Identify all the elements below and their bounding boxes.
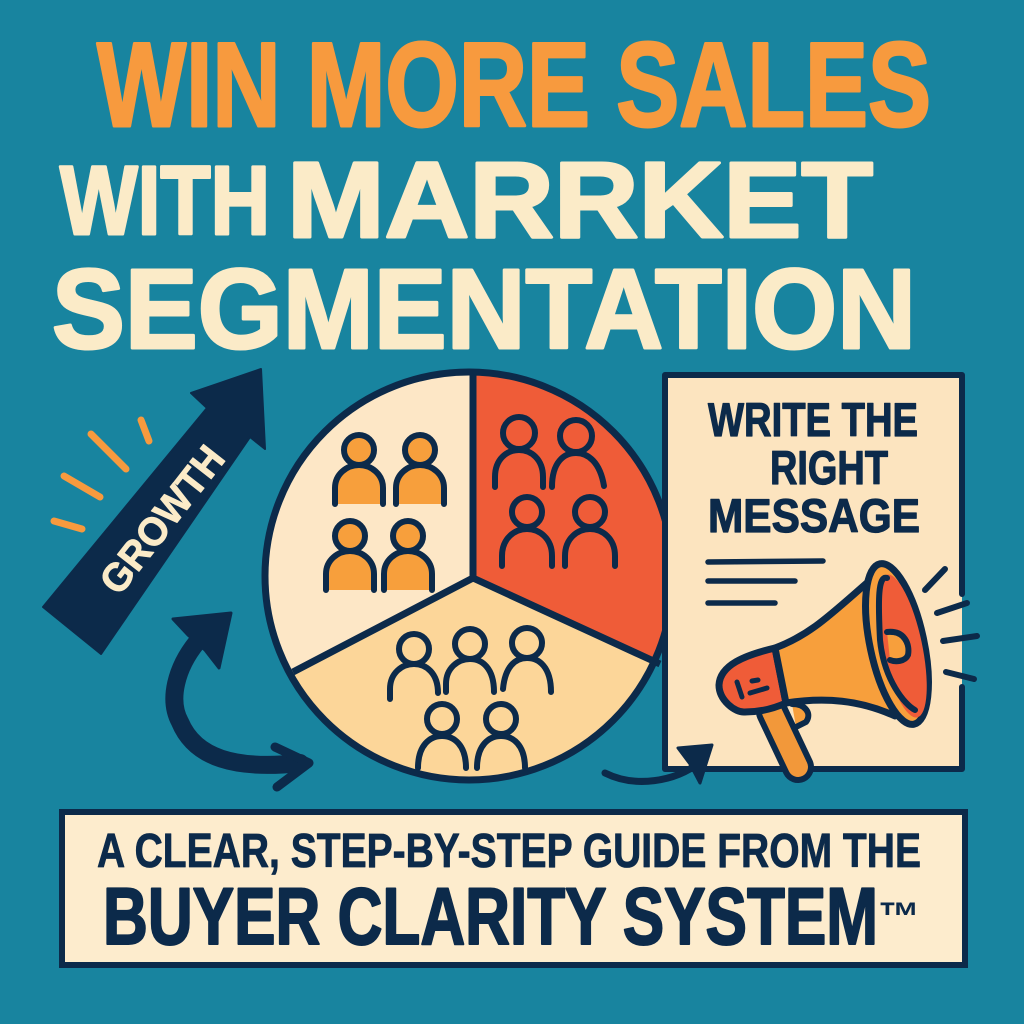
title line 2: with: WITH xyxy=(60,146,270,255)
segment: bottom xyxy=(293,582,650,776)
arrow: growth xyxy=(43,369,265,654)
trademark: ™ xyxy=(878,895,920,939)
title xyxy=(52,18,931,372)
panel: message poster xyxy=(665,375,962,769)
title line 3: SEGMENTATION xyxy=(52,246,916,372)
growth label: GROWTH xyxy=(91,438,234,603)
segment: left xyxy=(268,376,470,672)
people: right segment xyxy=(495,417,615,566)
title line 2: marrket: MARRKET xyxy=(287,139,873,260)
poster heading: RIGHT xyxy=(770,441,888,494)
poster heading: WRITE THE xyxy=(708,393,918,446)
people: left segment xyxy=(326,435,444,590)
poster heading: MESSAGE xyxy=(708,489,920,542)
icon: growth sparks xyxy=(54,420,149,529)
sound waves xyxy=(925,569,977,679)
icon: megaphone xyxy=(719,558,977,767)
arrow: curved double arrow xyxy=(173,613,309,787)
segment: right xyxy=(476,376,662,657)
people: bottom segment xyxy=(390,628,551,768)
poster heading xyxy=(708,393,920,542)
panel: bottom banner xyxy=(62,812,965,965)
pie chart xyxy=(262,368,662,784)
arrow: to poster xyxy=(605,745,712,783)
poster text lines xyxy=(708,561,823,603)
